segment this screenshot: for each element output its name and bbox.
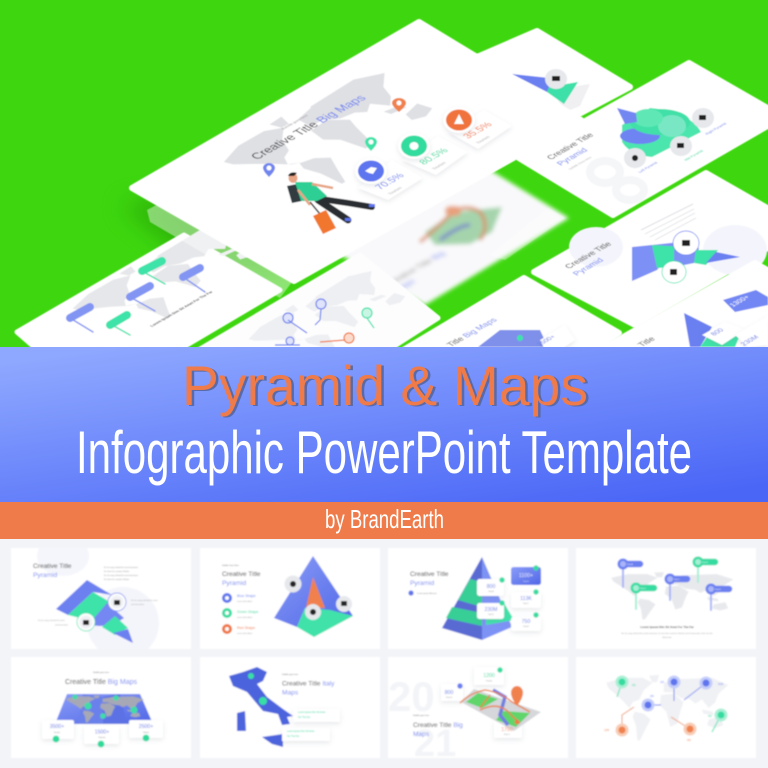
- thumbnail 6: italy map: For The Far: [298, 716, 310, 719]
- thumbnail 1: pyramid steps: Far from the countries Vokalia: [104, 570, 130, 573]
- thumbnail 1: pyramid steps: Creative Title: [33, 563, 72, 570]
- thumbnail 5: big maps folded map: 2500+: [139, 724, 153, 730]
- background: green: [0, 0, 768, 350]
- thumbnail 2: pyramid with shapes list: Pyramid: [222, 580, 247, 587]
- thumbnail 3: layered pyramid with cards: [388, 548, 568, 649]
- main slide: creative title big maps: Tourism: [431, 161, 448, 170]
- thumbnail 3: layered pyramid with cards: Point D: [488, 613, 495, 616]
- thumbnail 2: pyramid with shapes list: Creative Title: [222, 571, 261, 578]
- map pin: orange: [392, 98, 406, 112]
- orange author band: [0, 502, 768, 539]
- thumbnail 5: big maps folded map: Tourists: [54, 731, 60, 734]
- cards under percent values: [358, 110, 512, 200]
- slide: cone pyramid: Mid Pyramid: [683, 150, 704, 161]
- cone pyramid graphic: [617, 108, 714, 168]
- slide: cone pyramid: Right Pyramid: [704, 122, 728, 135]
- thumbnail 2: pyramid with shapes list: Blue Shape: [237, 594, 256, 598]
- main slide: creative title big maps: [132, 22, 581, 281]
- slide: cone pyramid: Left Pyramid: [637, 161, 658, 173]
- thumbnail 1: pyramid steps: Pyramid: [33, 572, 58, 579]
- thumbnail 3: layered pyramid with cards: 113K: [520, 596, 532, 602]
- slide: map with capsule pins: [17, 216, 281, 352]
- thumbnail 8: world map with arrows: 800: [632, 685, 637, 687]
- thumbnail 1: pyramid steps: Far from the countries Vokalia: [104, 578, 130, 581]
- slide: bottom right pyramid with cards: Title: [635, 335, 658, 348]
- thumbnail 3: layered pyramid with cards: Point C: [523, 602, 530, 605]
- slide: top right pyramid fragment: [470, 31, 630, 122]
- thumbnail 2: pyramid with shapes list: [200, 548, 380, 649]
- thumbnail 2: pyramid with shapes list: Lorem Dolor Amet: [237, 632, 253, 635]
- thumbnail 4: world map with flag pins: Point D: [640, 587, 647, 590]
- icon circle: blue: [355, 158, 387, 184]
- thumbnail 3: layered pyramid with cards: 1100+: [519, 573, 533, 579]
- slide: bottom right pyramid with cards: 800: [710, 328, 726, 337]
- thumbnail 6: italy map: [200, 657, 380, 758]
- slide: blurred city map behind main: Creative Title Big: [383, 250, 448, 287]
- thumbnail 5: big maps folded map: Creative Title Big Maps: [65, 679, 137, 686]
- thumbnail 5: big maps folded map: 3500+: [50, 724, 64, 730]
- thumbnail 6: italy map: Creative Title Italy: [282, 680, 335, 688]
- thumbnail 6: italy map: Lorem Ipsum Dim Sit Amet: [298, 711, 326, 714]
- icon circle: orange: [443, 107, 475, 133]
- thumbnail 8: world map with arrows: 250: [650, 696, 655, 698]
- thumbnail 7: city route map: Point B: [446, 696, 453, 699]
- translucent strip right: [490, 208, 565, 260]
- thumbnail 8: world map with arrows: 1289: [604, 730, 610, 732]
- thumbnail 5: big maps folded map: Subtitle goes here: [93, 671, 110, 674]
- stepped pyramid graphic: [632, 231, 740, 283]
- percent values: 70.5%: [373, 172, 407, 191]
- thumbnail 7: city route map: Maps: [413, 731, 430, 738]
- thumbnail 7: city route map: Point C: [504, 733, 511, 736]
- thumbnails background: [0, 539, 768, 768]
- main slide: creative title big maps: 35.5%: [461, 121, 495, 140]
- thumbnail 5: big maps folded map: Reviews: [99, 737, 105, 739]
- slide: cone pyramid: Subtitle Goes Here: [567, 156, 593, 170]
- thumbnail 7: city route map: Subtitle goes here: [413, 714, 430, 717]
- main slide: creative title big maps: Creative Title Big Maps: [247, 93, 369, 161]
- slide: big maps lower: [400, 278, 619, 352]
- slide: blurred city map behind main: [290, 170, 569, 305]
- map pin: blue: [263, 163, 275, 177]
- author text: by BrandEarth: [325, 504, 444, 534]
- slide: cone pyramid: Pyramid: [554, 146, 590, 167]
- thumbnail 3: layered pyramid with cards: 800: [487, 584, 495, 590]
- thumbnail 1: pyramid steps: and mountains: [131, 603, 144, 606]
- thumbnail 3: layered pyramid with cards: 750: [522, 619, 530, 625]
- slide: stepped pyramid: Pyramid: [570, 256, 606, 277]
- thumbnail 1: pyramid steps: [12, 548, 190, 648]
- slide: blurred city map behind main: Maps: [391, 278, 418, 293]
- slide: bottom right pyramid with cards: 1300+: [729, 295, 752, 308]
- thumbnail 1: pyramid steps: Far far away, behind the word mountains: [104, 566, 138, 569]
- slide: big maps lower: Title Big Maps: [444, 316, 499, 348]
- thumbnail 8: world map with arrows: 5100: [718, 684, 724, 686]
- slide: stepped pyramid: [534, 173, 768, 325]
- slide: big maps lower: 2500+: [536, 334, 558, 347]
- title: pyramid and maps: Pyramid & Maps: [184, 355, 590, 418]
- thumbnail 3: layered pyramid with cards: Point A: [488, 590, 495, 593]
- title band: [0, 347, 768, 502]
- thumbnail 8: world map with arrows: 125: [660, 682, 665, 684]
- slide: map with capsule pins: Lorem Ipsum Dim Sit Amet For The Far: [149, 290, 214, 327]
- thumbnail 6: italy map: Lorem Ipsum Dim Sit Amet: [287, 730, 315, 733]
- main slide: creative title big maps: Tourism: [475, 135, 492, 144]
- icon circle: green: [398, 133, 430, 159]
- main slide: creative title big maps: 80.5%: [417, 147, 451, 166]
- thumbnail 7: city route map: Point A: [486, 680, 493, 682]
- thumbnail 7: city route map: 800: [445, 690, 453, 696]
- thumbnail 5: big maps folded map: Visitors: [143, 731, 149, 734]
- thumbnail 6: italy map: For The Far: [287, 735, 299, 738]
- thumbnail 6: italy map: Maps: [282, 690, 299, 696]
- thumbnail 4: world map with flag pins: Point B: [702, 561, 709, 564]
- thumbnail 7: city route map: Creative Title Big: [413, 722, 463, 729]
- thumbnail 8: world map with arrows: 850: [708, 716, 713, 718]
- slide: stepped pyramid: Creative Title: [562, 240, 614, 270]
- thumbnail 2: pyramid with shapes list: Lorem Dolor Amet: [237, 600, 253, 603]
- slide: cone pyramid: Creative Title: [544, 131, 596, 161]
- thumbnail 3: layered pyramid with cards: 230M: [485, 607, 497, 613]
- thumbnail 4: world map with flag pins: blind texts: [662, 636, 672, 639]
- thumbnail 7: city route map: 21: [414, 723, 456, 765]
- thumbnail 4: world map with flag pins: Point E: [715, 588, 722, 591]
- main slide shadow: [120, 190, 300, 280]
- thumbnail 3: layered pyramid with cards: Pyramid: [410, 580, 435, 587]
- thumbnail 4: world map with flag pins: Point A: [627, 563, 633, 566]
- thumbnail 7: city route map: 20: [388, 673, 435, 720]
- map pin: green: [365, 137, 377, 151]
- traveller with suitcase: [287, 172, 375, 234]
- title shadow top: Pyramid & Maps: [182, 354, 588, 417]
- thumbnail 5: big maps folded map: [11, 657, 191, 758]
- thumbnail 7: city route map: [388, 657, 568, 765]
- ghost numerals: [590, 161, 644, 200]
- thumbnail 8: world map with arrows: 950: [687, 740, 692, 742]
- slide: bottom right pyramid with cards: [600, 263, 768, 395]
- thumbnail 8: world map with arrows: [576, 657, 756, 758]
- thumbnail 4: world map with flag pins: [576, 548, 756, 649]
- thumbnail 2: pyramid with shapes list: Lorem Dolor Amet: [237, 616, 253, 619]
- thumbnail 1: pyramid steps: Far far away, behind the word mountains: [104, 574, 138, 577]
- thumbnail 7: city route map: 1750: [501, 727, 513, 733]
- slide: map with arrows: [195, 255, 438, 371]
- thumbnail 4: world map with flag pins: Point C: [674, 578, 681, 581]
- thumbnail 4: world map with flag pins: Lorem Ipsum Dim Sit Amet For The Far: [640, 625, 695, 629]
- thumbnail 1: pyramid steps: Far far away, behind the word: [38, 619, 64, 622]
- thumbnail 4: world map with flag pins: Far far away, behind the word mountains, far from the countries Vokalia and Consonantia, there live the: [621, 632, 714, 635]
- thumbnail 7: city route map: 1200: [483, 673, 495, 679]
- slide: bottom right pyramid with cards: 230M: [740, 335, 761, 347]
- thumbnail 2: pyramid with shapes list: Red Shape: [237, 626, 255, 630]
- thumbnail 2: pyramid with shapes list: Green Shape: [237, 610, 258, 614]
- translucent slide strip under main: [147, 203, 292, 298]
- thumbnail 1: pyramid steps: Far far away, behind the word: [131, 599, 157, 602]
- main slide: creative title big maps: Tourism: [387, 186, 404, 195]
- thumbnail 3: layered pyramid with cards: Creative Title: [410, 571, 449, 578]
- thumbnail 3: layered pyramid with cards: Lorem Ipsum Element: [417, 592, 437, 595]
- slide: cone pyramid: [519, 63, 768, 215]
- thumbnail 1: pyramid steps: and mountains: [55, 624, 68, 626]
- thumbnail 2: pyramid with shapes list: Subtitle Goes Here: [222, 564, 240, 567]
- thumbnail 3: layered pyramid with cards: Point B: [523, 580, 530, 583]
- world map: [213, 65, 460, 207]
- heading: Subtitle goes here: [280, 114, 309, 130]
- thumbnail 6: italy map: Subtitle goes here: [282, 673, 299, 676]
- thumbnail 3: layered pyramid with cards: Point E: [523, 625, 530, 628]
- thumbnail 5: big maps folded map: 1500+: [95, 730, 109, 736]
